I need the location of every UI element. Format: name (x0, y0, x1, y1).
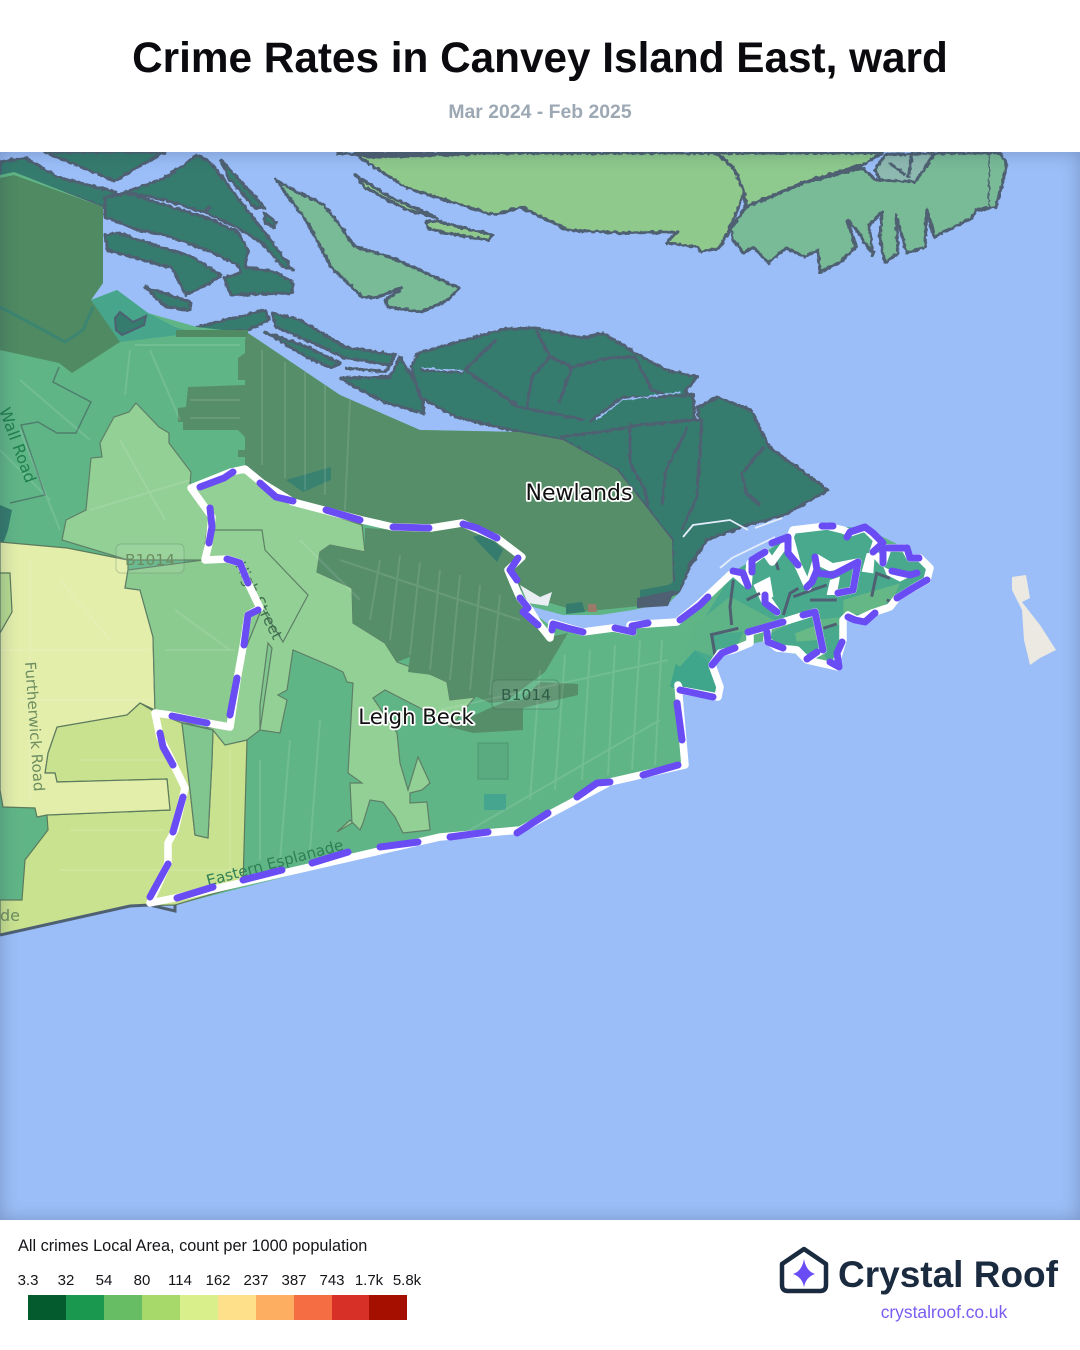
road label: Eastern Esplanade: Eastern Esplanade (204, 836, 345, 890)
northern marsh islands (0, 152, 424, 413)
offshore sandbank (1012, 575, 1056, 665)
legend: 387 (281, 1272, 307, 1289)
legend (18, 1237, 422, 1320)
road shield: B1014 centre (492, 680, 559, 709)
legend: 237 (243, 1272, 269, 1289)
ward boundary: purple dashes (150, 472, 927, 898)
legend: 743 (319, 1272, 345, 1289)
road label: fragment at west coast: de (0, 906, 20, 925)
teal coastal inlet island (91, 290, 195, 342)
legend colour scale (28, 1295, 407, 1320)
sub-area outlines in light zone (203, 530, 308, 642)
narrow strip by high street (260, 643, 272, 730)
narrow green strip (182, 723, 213, 838)
legend: 1.7k (355, 1272, 383, 1289)
title: Crime Rates in Canvey Island East, ward (132, 34, 948, 81)
legend: 80 (134, 1272, 150, 1289)
road shield: B1014 west: B1014 (125, 551, 175, 569)
ward boundary: white line (150, 469, 930, 903)
logo: Crystal Roof (780, 1246, 1058, 1322)
place label: Newlands: Newlands (526, 481, 632, 506)
legend: 3.3 (18, 1272, 38, 1289)
road shield: B1014 west (116, 544, 184, 573)
place label: Leigh Beck: Leigh Beck (358, 704, 474, 729)
top-left olive block (0, 175, 120, 373)
dark green area inside ward (317, 525, 578, 733)
icon: house with star (780, 1246, 828, 1294)
legend: 5.8k (393, 1272, 421, 1289)
legend: 54 (96, 1272, 112, 1289)
legend title: All crimes Local Area, count per 1000 population (18, 1237, 367, 1255)
Newlands dark green area (178, 333, 673, 612)
subtitle: date range: Mar 2024 - Feb 2025 (448, 101, 632, 123)
strip along north coast (176, 330, 248, 337)
legend values (18, 1272, 422, 1289)
pale yellow zone (0, 542, 170, 817)
legend: 32 (58, 1272, 74, 1289)
road shield: B1014 centre: B1014 (501, 686, 551, 704)
light green zone west of ward (125, 560, 262, 727)
big marsh north of Newlands (411, 328, 828, 606)
logo wordmark: Crystal Roof (838, 1254, 1058, 1295)
road label: High Street: High Street (231, 559, 286, 642)
pale yellow-green zone (0, 703, 247, 935)
website url: crystalroof.co.uk (881, 1302, 1007, 1322)
sub-area outlines west (10, 367, 91, 503)
river through block (0, 307, 93, 342)
marsh inlet fragment (115, 312, 146, 335)
teal patch west edge (0, 505, 12, 552)
legend: 114 (168, 1272, 192, 1289)
coastline stroke (0, 905, 175, 935)
eastern tail of the island (670, 526, 930, 697)
land base (0, 172, 930, 935)
road label: Furtherwick Road: Furtherwick Road (21, 661, 48, 792)
street texture (0, 345, 668, 880)
legend: 162 (205, 1272, 231, 1289)
lighter northern islands (276, 152, 1007, 312)
park and pond patches (286, 467, 680, 810)
light green zones (62, 403, 475, 833)
choropleth map (0, 152, 1080, 1220)
shore details (520, 518, 782, 614)
river channel (513, 518, 800, 632)
small green box in pale zone (0, 573, 12, 633)
